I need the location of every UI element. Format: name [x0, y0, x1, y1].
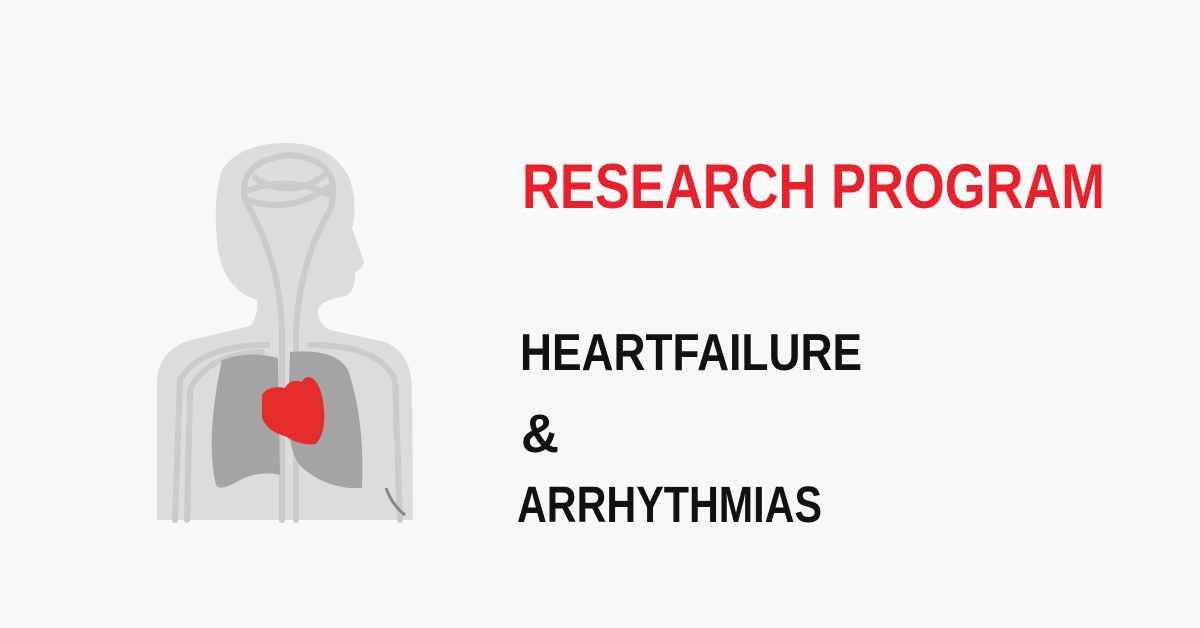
vessels: [175, 155, 400, 520]
esophagus/bottom tube: [386, 488, 405, 515]
text: heartfailure: HEARTFAILURE: [520, 324, 862, 382]
body silhouette: [157, 143, 413, 520]
heart: [262, 377, 324, 444]
text: ampersand: &: [521, 404, 559, 464]
text: arrhythmias: ARRHYTHMIAS: [517, 476, 822, 533]
illustration: human body with heart: [157, 143, 413, 520]
lungs: [212, 354, 280, 488]
